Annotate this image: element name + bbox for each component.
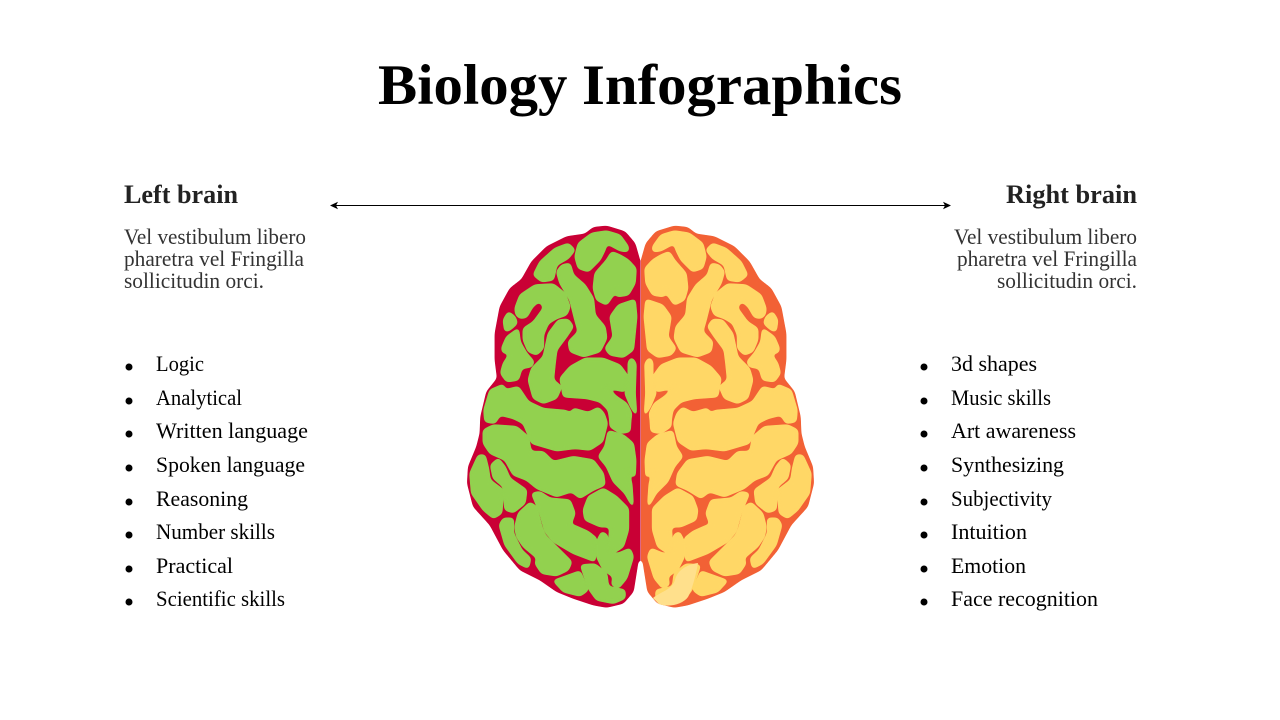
list: left brain skills: Scientific skills: [156, 586, 285, 611]
panel: right brain: [920, 180, 1138, 611]
list: left brain skills: Analytical: [156, 385, 242, 410]
heading: left brain: Left brain: [124, 180, 239, 209]
list: right brain skills: [920, 351, 1098, 611]
text block: right brain description: pharetra vel Fringilla: [957, 246, 1137, 271]
list: right brain skills: 3d shapes: [951, 351, 1037, 376]
text block: left brain description: Vel vestibulum libero: [124, 224, 306, 249]
list: left brain skills: [126, 351, 308, 611]
title: Biology Infographics: [378, 54, 902, 117]
panel: left brain: [124, 180, 308, 611]
list: left brain skills: Practical: [156, 553, 233, 578]
highlighted fold: [653, 563, 698, 606]
list: right brain skills: Face recognition: [951, 586, 1098, 611]
heading: right brain: Right brain: [1006, 180, 1138, 209]
list: left brain skills: Spoken language: [156, 452, 305, 477]
text block: right brain description: sollicitudin orci.: [997, 268, 1137, 293]
list: left brain skills: Number skills: [156, 519, 275, 544]
list: right brain skills: Intuition: [951, 519, 1027, 544]
list: left brain skills: Logic: [156, 351, 204, 376]
text block: right brain description: [954, 224, 1137, 293]
arrow: double-headed between hemispheres: [330, 202, 951, 209]
list: left brain skills: Reasoning: [156, 486, 248, 511]
brain illustration: [467, 226, 814, 607]
list: left brain skills: Written language: [156, 418, 308, 443]
list: right brain skills: Synthesizing: [951, 452, 1064, 477]
list: right brain skills: Emotion: [951, 553, 1026, 578]
text block: left brain description: [124, 224, 306, 293]
list: right brain skills: Subjectivity: [951, 486, 1052, 511]
text block: right brain description: Vel vestibulum libero: [954, 224, 1137, 249]
text block: left brain description: sollicitudin orci.: [124, 268, 264, 293]
text block: left brain description: pharetra vel Fringilla: [124, 246, 304, 271]
list: right brain skills: Art awareness: [951, 418, 1076, 443]
left hemisphere: [467, 226, 660, 607]
right hemisphere: [641, 226, 814, 608]
list: right brain skills: Music skills: [951, 385, 1051, 410]
